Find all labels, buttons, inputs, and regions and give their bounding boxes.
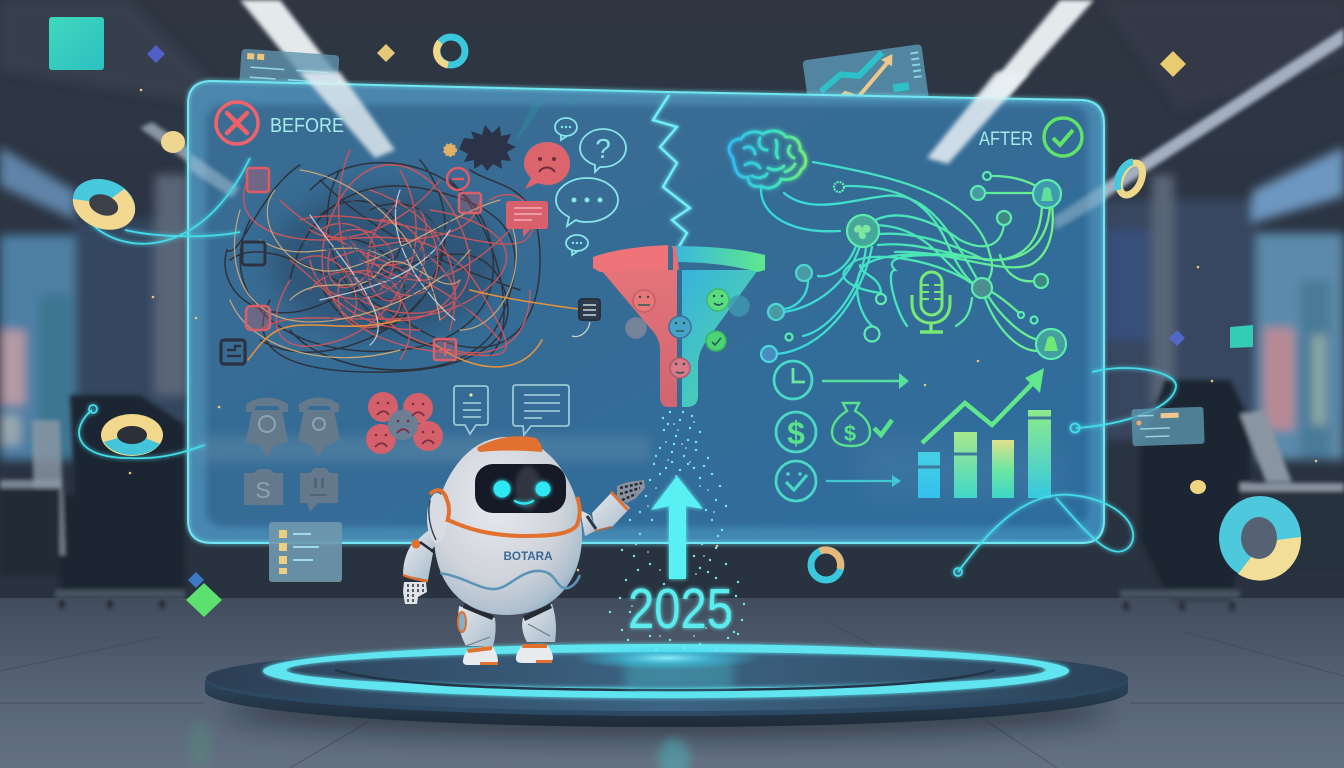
icon: smile check [776, 461, 816, 501]
icon: question and chat bubbles [555, 118, 626, 255]
arrow: growth trend [922, 368, 1044, 443]
icon: note bubbles outline [454, 385, 569, 435]
node: top right person [1033, 180, 1061, 208]
card: floating right [1131, 407, 1205, 446]
teal square [49, 17, 104, 70]
burst shapes [444, 96, 580, 171]
network nodes [761, 172, 1066, 362]
robot right hand [617, 480, 645, 503]
disk reflection [625, 660, 733, 690]
icon: sad speech bubble [524, 142, 570, 189]
robot wave line [440, 571, 580, 589]
ring: floor [811, 550, 841, 580]
label: after: AFTER [979, 129, 1033, 150]
funnel left red half [601, 270, 677, 407]
ring: left [65, 171, 142, 238]
icon: red note bubble [506, 201, 548, 237]
faded phones and service icons: S [255, 477, 271, 503]
before heading [216, 102, 344, 144]
funnel [593, 245, 765, 407]
label: before: BEFORE [270, 115, 344, 137]
particle stream [130, 90, 1316, 650]
background furniture [0, 380, 1344, 610]
card: floating list bottom left [269, 522, 342, 582]
robot head cap [477, 436, 542, 452]
card: floating top left [239, 49, 339, 101]
side orbit lines [79, 158, 1176, 576]
light beam reflections on panel [190, 72, 1104, 230]
robot name: BOTARA [504, 551, 552, 563]
icon cluster: sad faces [366, 392, 443, 454]
panel: holographic glass board [188, 81, 1104, 543]
ring: lower left [101, 414, 163, 456]
robot legs [458, 602, 556, 665]
node: butterfly hub [847, 215, 879, 247]
icon: question and chat bubbles: ? [595, 133, 611, 164]
arrow: time [822, 373, 909, 389]
ring: right large [1219, 496, 1301, 581]
robot chest band [448, 497, 580, 536]
platform [188, 644, 1128, 768]
funnel right teal half [682, 270, 758, 407]
network wires [761, 162, 1053, 354]
robot face [494, 480, 550, 504]
robot feet [463, 644, 553, 665]
arrow: up to 2025 [651, 476, 703, 579]
icon: green check [1044, 118, 1082, 156]
robot shoulder [427, 490, 449, 543]
decorative floating shapes [49, 17, 1301, 617]
after heading [979, 118, 1082, 156]
robot left hand [403, 582, 427, 604]
robot mascot [403, 436, 645, 665]
year label: 2025 [628, 577, 733, 641]
tangled wires [225, 150, 578, 372]
icon: clock [774, 361, 812, 399]
card: floating growth chart [802, 44, 930, 120]
ring: top [437, 37, 465, 65]
robot right arm [580, 480, 645, 536]
icon: glowing brain [729, 131, 806, 188]
zigzag crack divider [653, 95, 690, 250]
robot body [434, 437, 582, 615]
icon: money bag with check: $ [844, 421, 856, 446]
light spot [572, 646, 762, 670]
ring: right small [1115, 159, 1147, 199]
funnel rim [593, 245, 670, 272]
metric rows [774, 361, 909, 501]
ceiling light beams (behind panel) [140, 0, 1344, 212]
robot left arm [403, 526, 441, 604]
robot visor [475, 464, 566, 513]
node: bottom right person [1036, 329, 1066, 359]
tangle icons: small node squares [221, 168, 600, 364]
faded phones and service icons [244, 398, 340, 512]
bar chart [918, 368, 1051, 498]
arrow: satisfaction [826, 475, 901, 487]
glowing ring [263, 644, 1069, 698]
icon: microphone [912, 272, 950, 332]
icon: red cross [216, 102, 258, 144]
funnel faces [626, 289, 749, 378]
icon: dollar: $ [787, 415, 805, 451]
